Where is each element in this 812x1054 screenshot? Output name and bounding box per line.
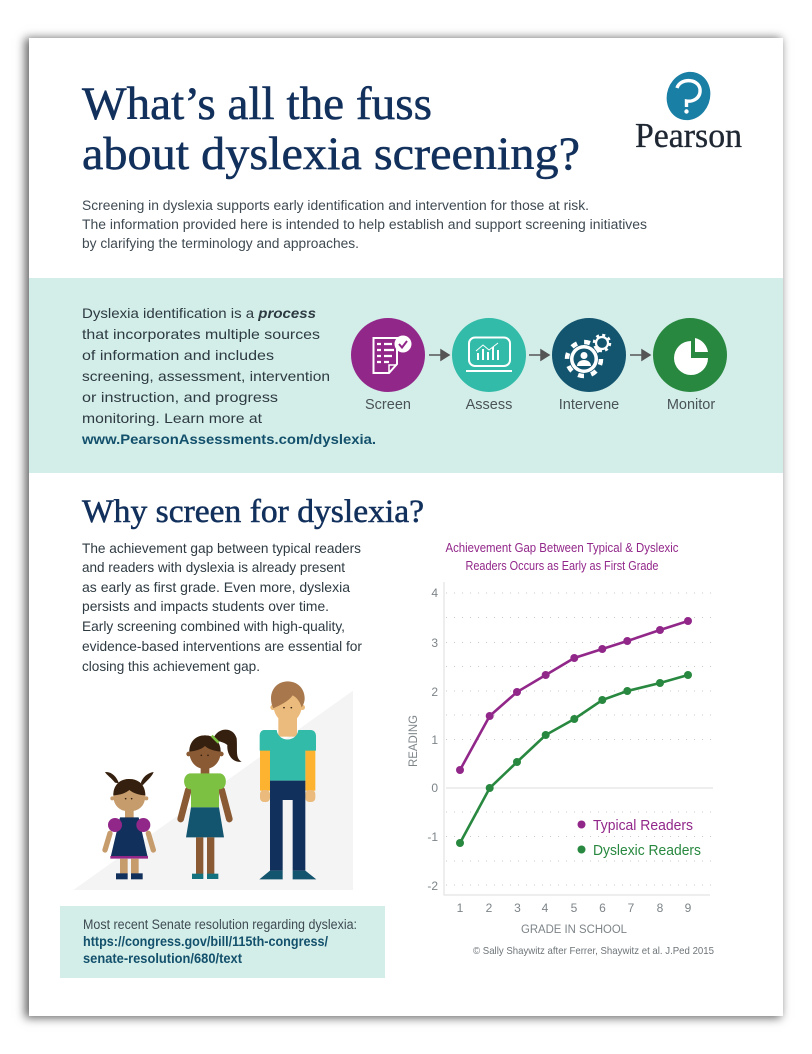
line chart <box>408 582 714 957</box>
callout: senate resolution <box>60 906 385 978</box>
figure: middle girl <box>181 730 242 879</box>
body text: why screen: persists and impacts students over time. <box>82 598 329 614</box>
icon: monitor <box>653 318 727 392</box>
chart source: © Sally Shaywitz after Ferrer, Shaywitz et al. J.Ped 2015 <box>473 945 714 957</box>
legend: Typical Readers <box>593 818 693 834</box>
process description text: of information and includes <box>82 347 274 363</box>
body text: why screen: The achievement gap between typical readers <box>82 540 361 556</box>
icon: screen <box>351 318 425 392</box>
body text: why screen <box>82 540 362 674</box>
process labels: Monitor <box>667 397 715 413</box>
icon: assess <box>452 318 526 392</box>
y axis labels: 4 <box>431 586 438 600</box>
x axis labels: 4 <box>542 901 549 915</box>
body text: why screen: as early as first grade. Even more, dyslexia <box>82 579 350 595</box>
body text: why screen: evidence-based interventions are essential for <box>82 638 362 654</box>
figure: tall boy <box>259 681 316 879</box>
callout: senate resolution: Most recent Senate resolution regarding dyslexia: <box>83 917 357 932</box>
figure: small girl <box>105 772 154 879</box>
y axis labels: 1 <box>431 733 438 747</box>
x axis labels: 5 <box>571 901 578 915</box>
x axis labels: 2 <box>486 901 493 915</box>
y axis labels: 2 <box>431 685 438 699</box>
icon: Pearson logo <box>635 66 742 155</box>
intro text <box>82 198 647 251</box>
arrow <box>630 350 650 360</box>
x axis labels: 9 <box>685 901 692 915</box>
y axis title: READING <box>408 715 420 767</box>
y axis labels: 0 <box>431 781 438 795</box>
process description text: or instruction, and progress <box>82 389 278 405</box>
callout: senate resolution: senate-resolution/680/text <box>83 950 242 966</box>
y axis labels: -1 <box>427 830 438 844</box>
process labels <box>365 397 715 413</box>
process description text: www.PearsonAssessments.com/dyslexia. <box>81 431 376 447</box>
heading: why screen: Why screen for dyslexia? <box>82 494 424 530</box>
x axis labels <box>457 901 692 915</box>
intro text: Screening in dyslexia supports early identification and intervention for those at risk. <box>82 198 589 213</box>
body text: why screen: and readers with dyslexia is already present <box>82 559 345 575</box>
process labels: Intervene <box>559 397 619 413</box>
series: typical readers <box>456 617 692 774</box>
process labels: Assess <box>466 397 512 413</box>
legend: Dyslexic Readers <box>593 843 701 859</box>
intro text: by clarifying the terminology and approaches. <box>82 236 359 251</box>
intro text: The information provided here is intended to help establish and support screening initiatives <box>82 217 647 232</box>
process description text: screening, assessment, intervention <box>82 368 330 384</box>
y axis labels <box>427 586 438 893</box>
x axis labels: 6 <box>599 901 606 915</box>
process description text <box>81 305 376 447</box>
x axis title: GRADE IN SCHOOL <box>521 924 628 936</box>
body text: why screen: Early screening combined with high-quality, <box>82 618 345 634</box>
arrow <box>529 350 549 360</box>
chart axes and grid <box>444 582 713 895</box>
legend <box>578 818 701 859</box>
x axis labels: 1 <box>457 901 464 915</box>
process labels: Screen <box>365 397 411 413</box>
arrow <box>429 350 449 360</box>
process description text: that incorporates multiple sources <box>82 326 320 342</box>
process description text: monitoring. Learn more at <box>82 410 262 426</box>
process description text: Dyslexia identification is a process <box>82 305 316 321</box>
illustration: three growing children <box>73 681 353 890</box>
series: dyslexic readers <box>456 671 692 847</box>
title: What’s all the fuss <box>82 78 432 130</box>
title <box>82 78 580 180</box>
icon: Pearson logo: Pearson <box>635 116 742 155</box>
x axis labels: 3 <box>514 901 521 915</box>
panel: process band <box>29 278 783 473</box>
icon: intervene <box>552 318 626 392</box>
callout: senate resolution: https://congress.gov/bill/115th-congress/ <box>83 933 328 949</box>
x axis labels: 8 <box>657 901 664 915</box>
chart title: Readers Occurs as Early as First Grade <box>466 559 659 573</box>
body text: why screen: closing this achievement gap. <box>82 658 260 674</box>
x axis labels: 7 <box>628 901 635 915</box>
chart title <box>446 541 678 573</box>
process diagram <box>351 318 727 413</box>
chart title: Achievement Gap Between Typical & Dyslexic <box>446 541 678 555</box>
title: about dyslexia screening? <box>82 128 580 180</box>
y axis labels: -2 <box>427 879 438 893</box>
y axis labels: 3 <box>431 636 438 650</box>
